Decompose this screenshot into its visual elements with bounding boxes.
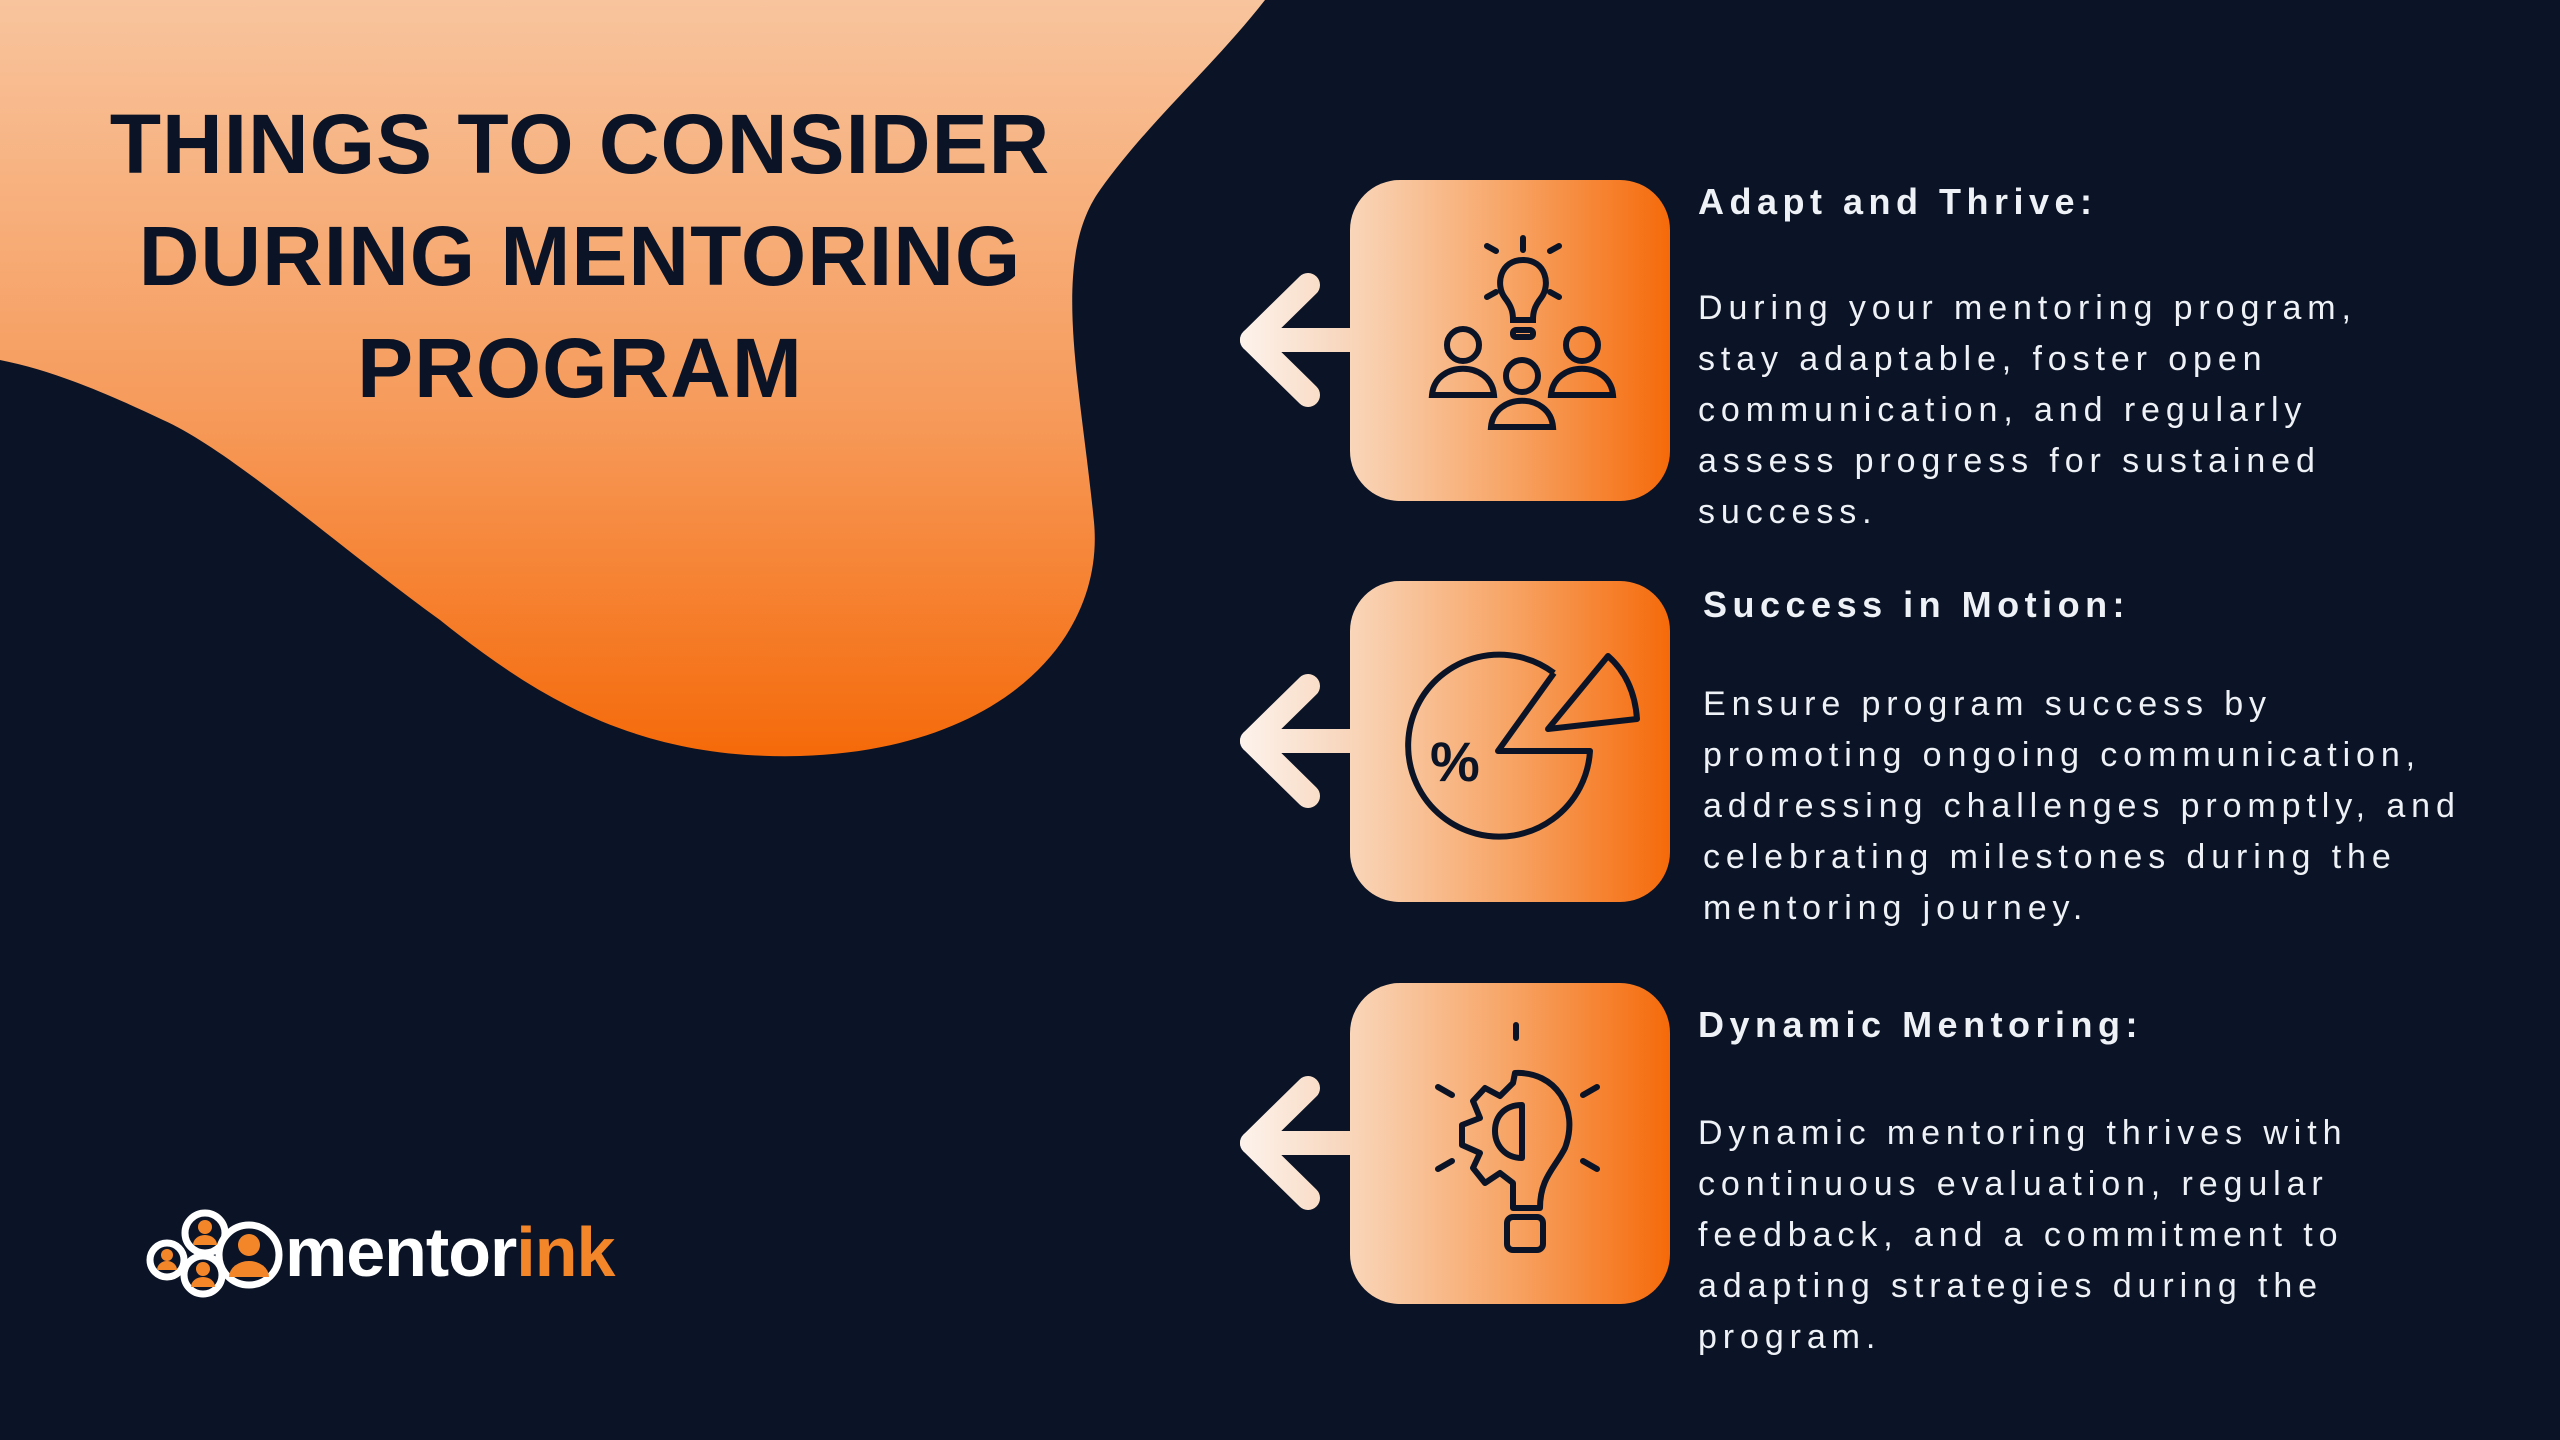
text 2: celebrating milestones during the — [1703, 838, 2397, 876]
text 2: promoting ongoing communication, — [1703, 736, 2421, 774]
text 1: communication, and regularly — [1698, 391, 2307, 429]
card 1 — [1240, 180, 1670, 501]
icon: pie chart — [1408, 655, 1637, 837]
text 3: continuous evaluation, regular — [1698, 1165, 2329, 1203]
title — [110, 97, 1050, 415]
text 2 — [1703, 584, 2461, 927]
title: THINGS TO CONSIDER — [110, 97, 1050, 191]
text 1: success. — [1698, 493, 1877, 531]
icon: gear bulb — [1438, 1025, 1597, 1250]
arrow 3 — [1252, 1088, 1360, 1198]
icon: pie chart: % — [1430, 730, 1480, 793]
text 3: adapting strategies during the — [1698, 1267, 2323, 1305]
text 1: During your mentoring program, — [1698, 289, 2357, 327]
text 3: program. — [1698, 1318, 1881, 1356]
icon: team idea — [1432, 238, 1613, 427]
text 1: Adapt and Thrive: — [1698, 181, 2098, 222]
text 1 — [1698, 181, 2357, 531]
text 3: feedback, and a commitment to — [1698, 1216, 2343, 1254]
logo icon — [146, 1210, 282, 1298]
text 2: Ensure program success by — [1703, 685, 2272, 723]
text 1: stay adaptable, foster open — [1698, 340, 2267, 378]
text 2: Success in Motion: — [1703, 584, 2130, 625]
arrow 2 — [1252, 686, 1360, 796]
text 1: assess progress for sustained — [1698, 442, 2321, 480]
text 2: addressing challenges promptly, and — [1703, 787, 2461, 825]
logo — [146, 1210, 616, 1298]
text 2: mentoring journey. — [1703, 889, 2088, 927]
logo text: mentorink — [285, 1213, 614, 1291]
text 3 — [1698, 1004, 2347, 1356]
title: DURING MENTORING — [139, 209, 1021, 303]
text 3: Dynamic Mentoring: — [1698, 1004, 2143, 1045]
text 3: Dynamic mentoring thrives with — [1698, 1114, 2347, 1152]
card 2 — [1240, 581, 1670, 902]
title: PROGRAM — [357, 321, 803, 415]
card 3 — [1240, 983, 1670, 1304]
arrow 1 — [1252, 285, 1360, 395]
